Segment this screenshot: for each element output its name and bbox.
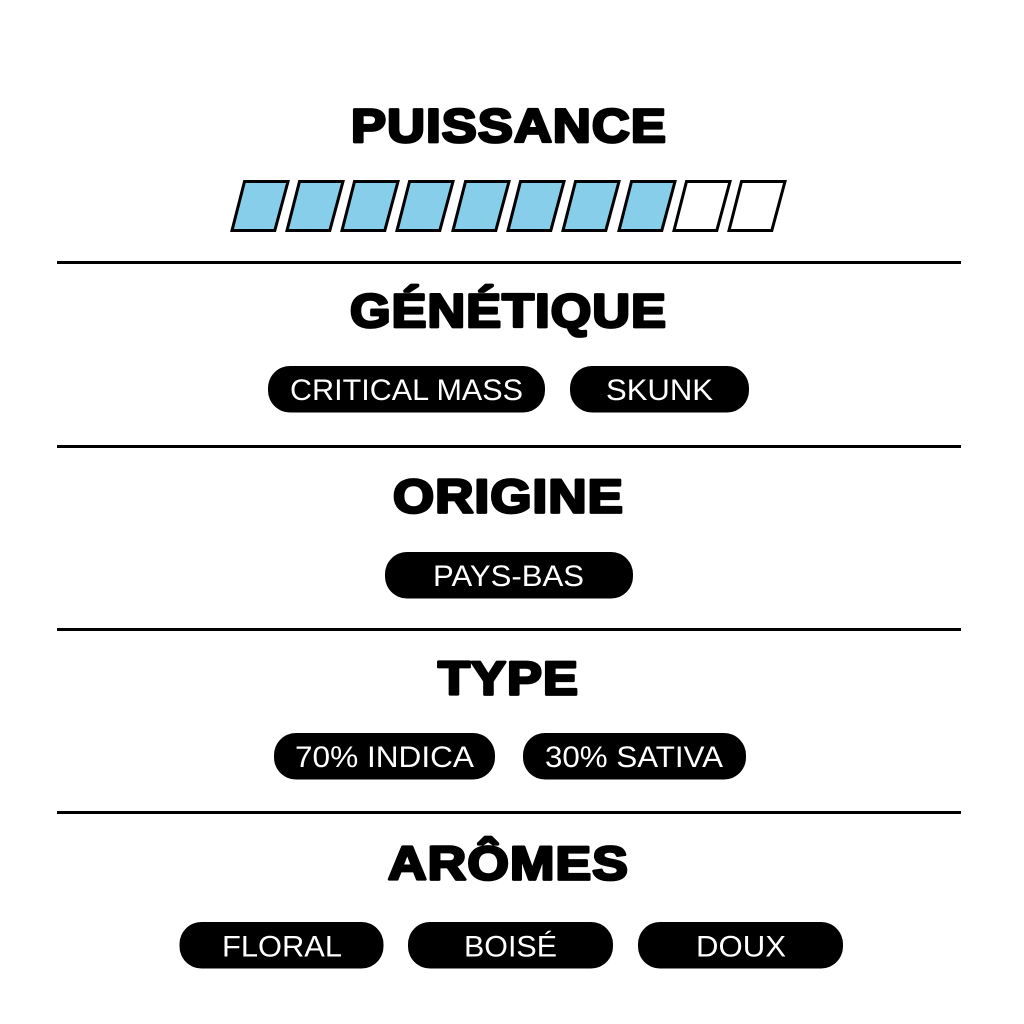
tag: floral [180,922,384,968]
section: arômes [180,836,843,968]
tag: 70% indica [274,733,495,780]
tag: doux [638,922,843,968]
heading: arômes: ARÔMES [388,836,629,890]
section: origine [385,470,633,598]
tag: boisé: BOISÉ [464,930,557,964]
tag: skunk: SKUNK [606,374,713,407]
tag: boisé [408,922,613,968]
tag: doux: DOUX [696,930,786,964]
tag: pays-bas [385,552,633,598]
heading: origine: ORIGINE [393,470,624,522]
tag: floral: FLORAL [222,930,342,964]
section: type [274,652,746,780]
tag: 30% sativa [523,733,746,780]
tag: 70% indica: 70% INDICA [295,741,474,774]
heading: puissance: PUISSANCE [351,99,667,152]
tag: skunk [570,366,749,412]
heading: génétique: GÉNÉTIQUE [350,284,667,337]
heading: type: TYPE [438,652,579,704]
tag: critical mass: CRITICAL MASS [290,374,523,407]
section: puissance [232,99,785,230]
tag: 30% sativa: 30% SATIVA [545,741,723,774]
section: génétique [268,284,749,412]
tag: critical mass [268,366,545,412]
gauge: 8 of 10 segments filled [232,182,785,230]
tag: pays-bas: PAYS-BAS [433,560,584,593]
